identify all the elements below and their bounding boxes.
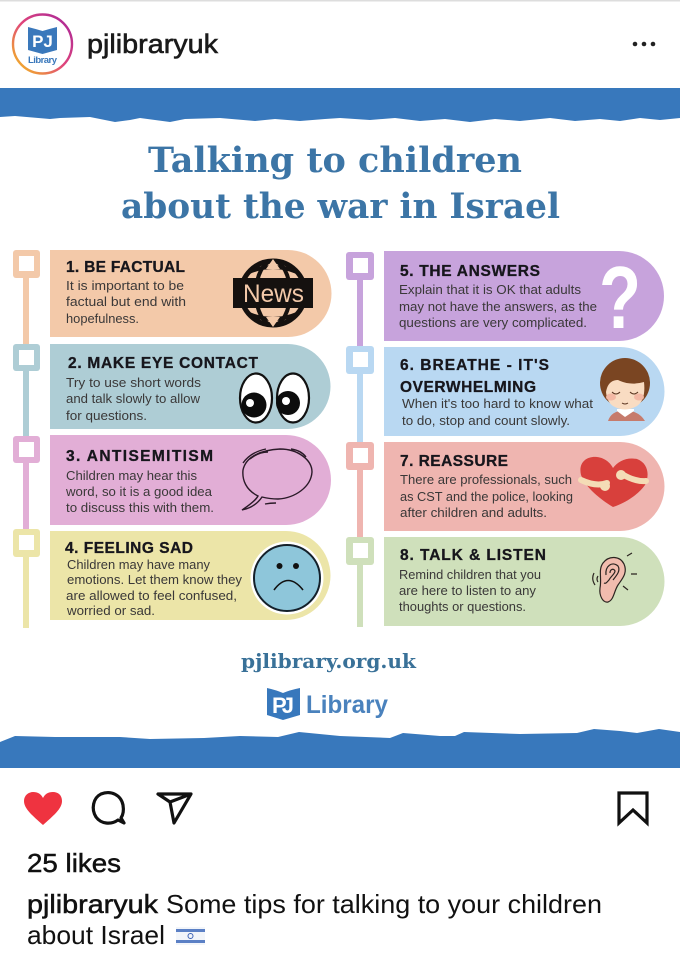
panel 8: talk and listen: thoughts or questions. (399, 599, 526, 614)
panel 1: be factual: It is important to be (66, 278, 184, 293)
account name: pjlibraryuk (87, 29, 219, 59)
caption: about Israel (27, 920, 165, 950)
panel 5: the answers: questions are very complicated. (399, 315, 587, 330)
panel 7: reassure: after children and adults. (400, 505, 547, 520)
title: about the war in Israel (121, 186, 560, 227)
panel 3: antisemitism: 3. ANTISEMITISM (66, 448, 213, 465)
avatar: PJ Library logo in gradient ring (13, 14, 72, 74)
panel 2: make eye contact: Try to use short words (66, 375, 201, 390)
title (121, 140, 560, 227)
panel 8: talk and listen: 8. TALK & LISTEN (400, 547, 546, 564)
panel 4: feeling sad: worried or sad. (66, 603, 155, 618)
icon: question mark: ? (599, 248, 641, 347)
PJ Library logo: Library (306, 691, 388, 719)
PJ Library logo: PJ (272, 693, 294, 718)
panel 5: the answers: may not have the answers, as the (399, 299, 597, 314)
panel 4: feeling sad: are allowed to feel confused, (66, 588, 237, 603)
panel 1: be factual: factual but end with (66, 294, 186, 309)
avatar: PJ Library logo in gradient ring: Library (28, 55, 58, 66)
timeline markers: right column (346, 252, 374, 627)
title: Talking to children (148, 140, 522, 181)
caption (27, 889, 602, 950)
panel 4: feeling sad: 4. FEELING SAD (65, 540, 193, 557)
bottom torn blue band (0, 729, 680, 768)
icon: speech bubble (242, 449, 312, 510)
panel 5: the answers: Explain that it is OK that adults (399, 282, 581, 297)
panel 4: feeling sad: emotions. Let them know they (67, 572, 242, 587)
icon: comment (93, 793, 124, 823)
panel 1: be factual: 1. BE FACTUAL (66, 259, 185, 276)
action bar (24, 792, 647, 825)
panel 7: reassure: There are professionals, such (400, 472, 572, 487)
panel 3: antisemitism (50, 435, 331, 525)
panel 2: make eye contact: and talk slowly to allow (66, 391, 200, 406)
panel 2: make eye contact: for questions. (66, 408, 147, 423)
panel 1: be factual: hopefulness. (66, 311, 139, 326)
panel 3: antisemitism: Children may hear this (66, 468, 197, 483)
icon: heart hugged by arms (580, 457, 648, 507)
icon: like heart (24, 792, 62, 825)
icon: bookmark (619, 793, 647, 823)
avatar: PJ Library logo in gradient ring: PJ (32, 32, 53, 51)
likes count: 25 likes (27, 848, 121, 878)
icon: news globe: News (243, 280, 304, 308)
panel 3: antisemitism: to discuss this with them. (66, 500, 214, 515)
PJ Library logo (267, 688, 388, 720)
icon: sad face (250, 542, 324, 614)
panel 6: breathe: OVERWHELMING (400, 379, 536, 396)
panel 1: be factual (50, 250, 332, 337)
icon: ear with sound lines (593, 553, 637, 602)
icon: news globe (233, 259, 313, 327)
panel 6: breathe: When it's too hard to know what (402, 396, 593, 411)
caption: pjlibraryuk (27, 889, 159, 919)
panel 7: reassure: 7. REASSURE (400, 453, 508, 470)
panel 3: antisemitism: word, so it is a good idea (65, 484, 213, 499)
icon: cartoon eyes (240, 374, 309, 422)
panel 2: make eye contact (50, 344, 330, 429)
panel 5: the answers (384, 248, 664, 347)
panel 2: make eye contact: 2. MAKE EYE CONTACT (68, 355, 259, 372)
panel 5: the answers: 5. THE ANSWERS (400, 263, 540, 280)
icon: more options dots (633, 42, 655, 46)
panel 7: reassure: as CST and the police, looking (400, 489, 573, 504)
panel 6: breathe: 6. BREATHE - IT'S (400, 357, 549, 374)
icon: Israeli flag (176, 927, 205, 945)
panel 7: reassure (384, 442, 664, 531)
website address: pjlibrary.org.uk (241, 649, 417, 673)
timeline markers: left column (13, 250, 40, 628)
top torn blue band (0, 88, 680, 122)
panel 8: talk and listen: Remind children that you (399, 567, 541, 582)
panel 6: breathe: to do, stop and count slowly. (402, 413, 570, 428)
panel 4: feeling sad (50, 531, 330, 620)
icon: calm boy (600, 358, 650, 421)
caption: Some tips for talking to your children (166, 889, 602, 919)
panel 8: talk and listen (384, 537, 664, 626)
Instagram post header (13, 14, 655, 74)
panel 4: feeling sad: Children may have many (67, 557, 210, 572)
icon: share (158, 794, 191, 823)
panel 6: breathe (384, 347, 664, 436)
panel 8: talk and listen: are here to listen to any (399, 583, 536, 598)
